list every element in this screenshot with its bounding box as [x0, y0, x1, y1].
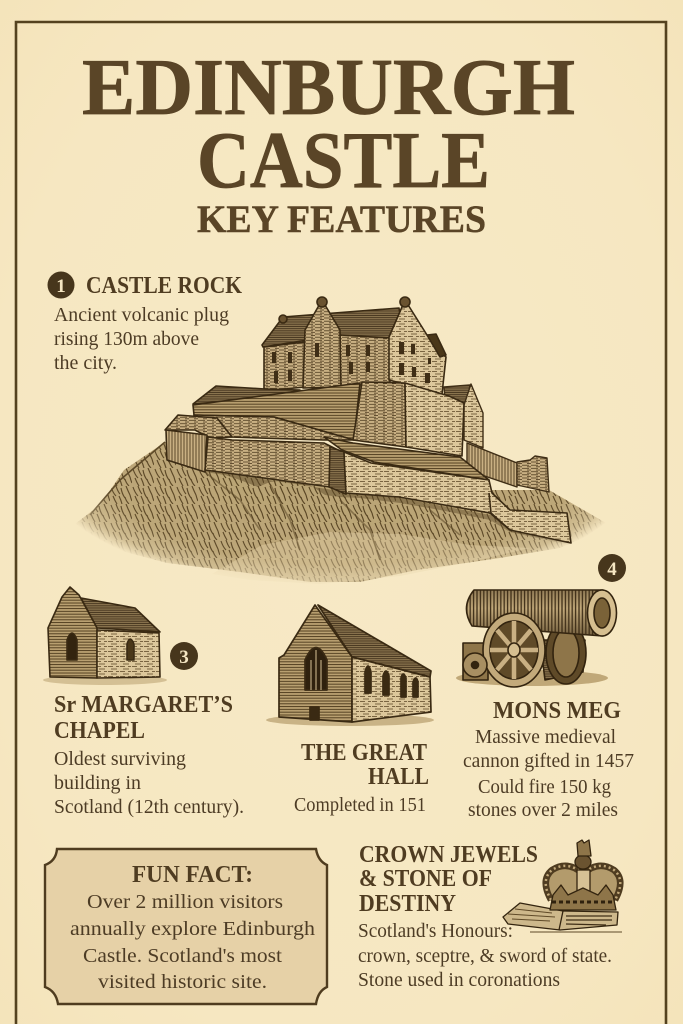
text: Great Hall: Completed in 151	[294, 795, 426, 816]
number badge 1	[48, 272, 74, 298]
illustration: Mons Meg cannon	[456, 590, 616, 687]
text: crown jewels: crown, sceptre, & sword of state.	[358, 946, 612, 967]
number badge 3: 3	[179, 647, 189, 668]
number badge 1: 1	[56, 276, 66, 297]
sloped terrace and curtain wall	[324, 437, 571, 543]
text: St Margaret's chapel: building in	[54, 773, 141, 794]
text: Mons Meg: Could fire 150 kg	[478, 777, 611, 798]
illustration: Great Hall	[266, 605, 434, 726]
middle wall	[205, 437, 346, 494]
small right tower	[444, 384, 483, 448]
main keep	[262, 297, 446, 394]
feature 1: castle rock: CASTLE ROCK	[86, 272, 242, 299]
panel: fun fact: FUN FACT:	[132, 861, 253, 888]
number badge 4	[598, 554, 626, 582]
text: Great Hall: HALL	[368, 763, 429, 790]
text: St Margaret's chapel: CHAPEL	[54, 717, 145, 744]
text: crown jewels: & STONE OF	[359, 865, 492, 892]
number badge 4: 4	[607, 559, 617, 580]
hill	[71, 442, 606, 584]
illustration: castle rock with fortress	[48, 272, 606, 584]
feature 1: castle rock: rising 130m above	[54, 329, 199, 350]
great bastion	[353, 382, 464, 456]
text: St Margaret's chapel	[54, 691, 244, 818]
left bastion	[165, 415, 232, 472]
text: Mons Meg	[463, 697, 634, 821]
text: crown jewels: Scotland's Honours:	[358, 921, 513, 942]
text: crown jewels	[358, 841, 612, 991]
title: EDINBURGH	[82, 44, 575, 132]
text: St Margaret's chapel: Sr MARGARET’S	[54, 691, 233, 718]
text: Mons Meg: MONS MEG	[493, 697, 621, 724]
text: Great Hall: THE GREAT	[301, 739, 427, 766]
text: St Margaret's chapel: Oldest surviving	[54, 749, 186, 770]
panel: fun fact: Over 2 million visitors	[87, 891, 283, 913]
text: crown jewels: Stone used in coronations	[358, 970, 560, 991]
title: CASTLE	[197, 117, 490, 205]
right wall and turret	[467, 443, 549, 492]
feature 1: castle rock: Ancient volcanic plug	[54, 305, 229, 326]
title: KEY FEATURES	[197, 198, 486, 241]
number badge 3	[170, 642, 198, 670]
text: St Margaret's chapel: Scotland (12th century).	[54, 797, 244, 818]
text: Mons Meg: cannon gifted in 1457	[463, 751, 634, 772]
feature 1: castle rock: the city.	[54, 353, 117, 374]
illustration: crown and Stone of Destiny	[503, 840, 622, 932]
panel: fun fact: annually explore Edinburgh	[70, 918, 315, 940]
title	[82, 44, 575, 241]
panel: fun fact: Castle. Scotland's most	[83, 945, 282, 967]
text: Mons Meg: Massive medieval	[475, 727, 617, 748]
text: Great Hall	[294, 739, 429, 816]
text: crown jewels: CROWN JEWELS	[359, 841, 538, 868]
feature 1: castle rock	[48, 272, 242, 374]
upper rampart	[193, 383, 360, 440]
text: crown jewels: DESTINY	[359, 890, 456, 917]
panel: fun fact: visited historic site.	[98, 971, 267, 993]
panel: fun fact	[45, 849, 327, 1004]
text: Mons Meg: stones over 2 miles	[468, 800, 618, 821]
illustration: St Margaret's chapel	[43, 587, 167, 685]
